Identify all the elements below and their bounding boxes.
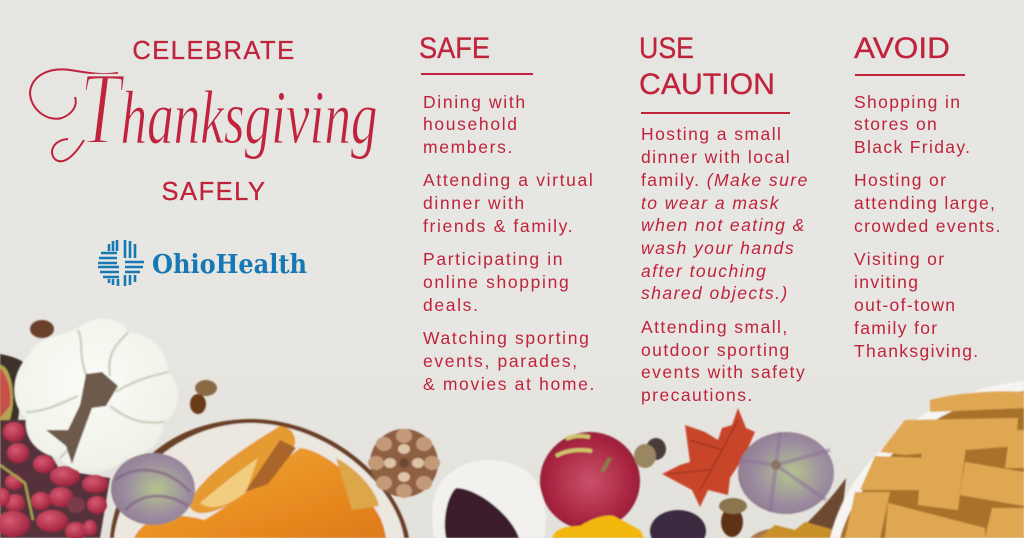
- food: chestnut: [30, 320, 54, 338]
- list: out-of-town: [854, 295, 956, 315]
- heading: safely: SAFELY: [162, 178, 266, 206]
- food: maple leaf: [662, 408, 755, 507]
- title: [30, 37, 378, 206]
- list: precautions.: [641, 385, 754, 405]
- food: acorn: [190, 380, 217, 414]
- heading: thanksgiving script: Thanksgiving: [80, 51, 378, 166]
- list: deals.: [423, 295, 480, 315]
- list: dinner with local: [641, 147, 791, 167]
- food: plum: [650, 510, 706, 538]
- list: wash your hands: [641, 238, 795, 258]
- food: pinecone: [368, 429, 440, 498]
- food: turkey platter: [110, 419, 409, 538]
- food: sunflower: [552, 515, 644, 538]
- list: (Make sure: [707, 170, 809, 190]
- list: Attending a virtual: [423, 170, 594, 190]
- list: household: [423, 114, 519, 134]
- panel: avoid: [854, 32, 1008, 361]
- list: Visiting or: [854, 249, 945, 269]
- food photo strip: [0, 319, 1024, 538]
- list: family for: [854, 318, 938, 338]
- list: when not eating &: [641, 215, 806, 235]
- food: lattice pie: [830, 381, 1024, 538]
- list: Black Friday.: [854, 137, 971, 157]
- list: outdoor sporting: [641, 340, 791, 360]
- icon: woven cross: [98, 240, 144, 286]
- list: dinner with: [423, 193, 526, 213]
- food: acorn 2: [634, 438, 666, 468]
- list: Hosting or: [854, 170, 947, 190]
- list: Hosting a small: [641, 124, 782, 144]
- list: Participating in: [423, 249, 564, 269]
- list: family.: [641, 170, 707, 190]
- list: shared objects.): [641, 283, 789, 303]
- food: grape bowl and grapes: [0, 354, 110, 538]
- food: fig right: [738, 432, 834, 514]
- food: apple: [540, 432, 640, 530]
- list: inviting: [854, 272, 919, 292]
- list: after touching: [641, 261, 767, 281]
- list: & movies at home.: [423, 374, 596, 394]
- list: online shopping: [423, 272, 570, 292]
- heading: AVOID: [854, 32, 950, 65]
- brand name: OhioHealth: [152, 250, 307, 280]
- list: Watching sporting: [423, 328, 590, 348]
- list: stores on: [854, 114, 938, 134]
- food: acorn 3 and nuts: [719, 478, 846, 538]
- list: events, parades,: [423, 351, 579, 371]
- list: Dining with: [423, 92, 527, 112]
- food: fig left: [111, 453, 195, 525]
- heading: celebrate: CELEBRATE: [132, 37, 296, 65]
- list: Attending small,: [641, 317, 789, 337]
- heading: USE: [639, 32, 694, 65]
- panel: use caution: CAUTION: [639, 68, 775, 101]
- list: events with safety: [641, 362, 806, 382]
- list: to wear a mask: [641, 193, 780, 213]
- list: attending large,: [854, 193, 996, 213]
- panel: safe: [419, 32, 596, 394]
- list: members.: [423, 137, 514, 157]
- list: crowded events.: [854, 216, 1002, 236]
- list: Shopping in: [854, 92, 961, 112]
- list: Thanksgiving.: [854, 341, 980, 361]
- food: gravy boat: [432, 460, 546, 538]
- heading: SAFE: [419, 32, 490, 65]
- food: white pumpkin: [14, 319, 178, 473]
- list: friends & family.: [423, 216, 574, 236]
- panel: use caution: [639, 32, 815, 405]
- logo: OhioHealth: [98, 240, 307, 286]
